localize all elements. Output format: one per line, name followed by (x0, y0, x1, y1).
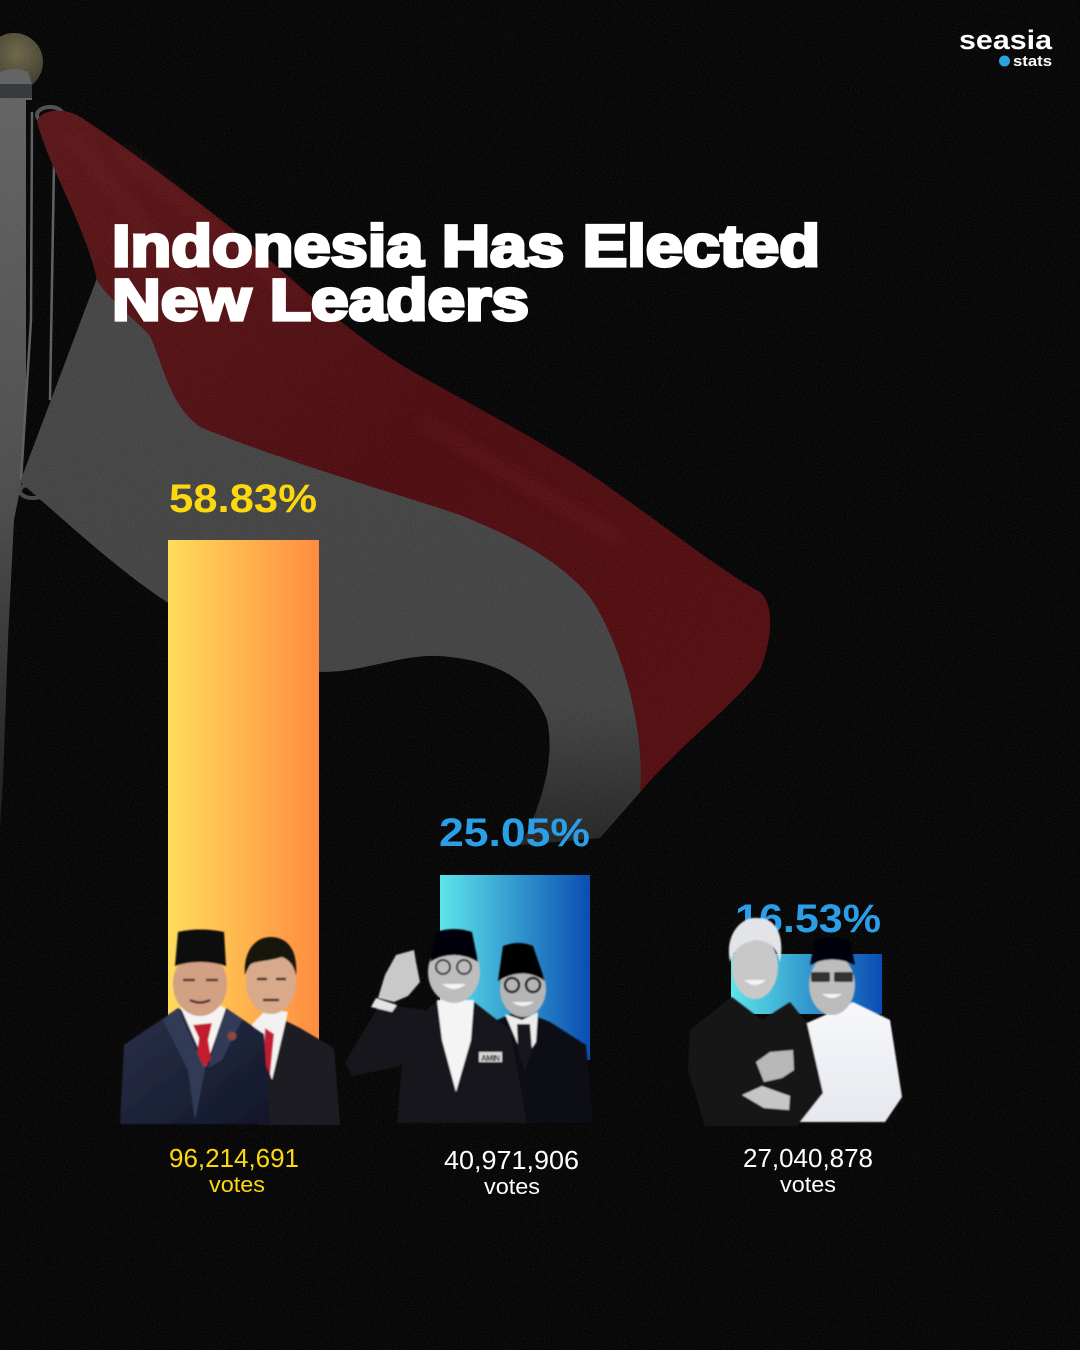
Muhaimin (497, 943, 593, 1123)
logo: seasia stats: stats (1013, 53, 1052, 70)
logo: seasia stats: seasia (959, 25, 1053, 55)
votes: 27,040,878: votes (780, 1172, 836, 1197)
votes: 27,040,878: 27,040,878 (743, 1143, 873, 1173)
Anies: AMIN (481, 1054, 500, 1063)
title (112, 214, 820, 333)
votes: 40,971,906: 40,971,906 (444, 1145, 579, 1175)
logo: seasia stats (959, 25, 1053, 70)
votes: 96,214,691: 96,214,691 (169, 1143, 299, 1173)
candidates: Ganjar and Mahfud (688, 918, 902, 1126)
flag: white stripe (20, 278, 660, 845)
title: New Leaders (112, 268, 529, 333)
votes: 40,971,906 (444, 1145, 579, 1199)
percentage: 16.53%: 16.53% (735, 897, 881, 941)
Prabowo (120, 930, 270, 1124)
candidates: Prabowo and Gibran (120, 930, 340, 1125)
votes: 27,040,878 (743, 1143, 873, 1197)
percentage: 58.83%: 58.83% (169, 477, 317, 521)
flag fold highlights (70, 135, 620, 540)
bar: 58.83% (168, 540, 319, 1040)
Mahfud (797, 938, 902, 1122)
votes: 40,971,906: votes (484, 1174, 540, 1199)
title: Indonesia Has Elected (112, 214, 820, 279)
percentage: 25.05%: 25.05% (439, 811, 590, 855)
candidates: Anies and Muhaimin (345, 929, 593, 1123)
Anies (345, 929, 527, 1123)
votes: 96,214,691: votes (209, 1172, 265, 1197)
flag pole (0, 33, 63, 830)
votes: 96,214,691 (169, 1143, 299, 1197)
bar: 25.05% (440, 875, 590, 1060)
Gibran (245, 937, 340, 1125)
bar: 16.53% (731, 954, 882, 1014)
Ganjar (688, 918, 823, 1126)
flag: red stripe (37, 110, 770, 792)
